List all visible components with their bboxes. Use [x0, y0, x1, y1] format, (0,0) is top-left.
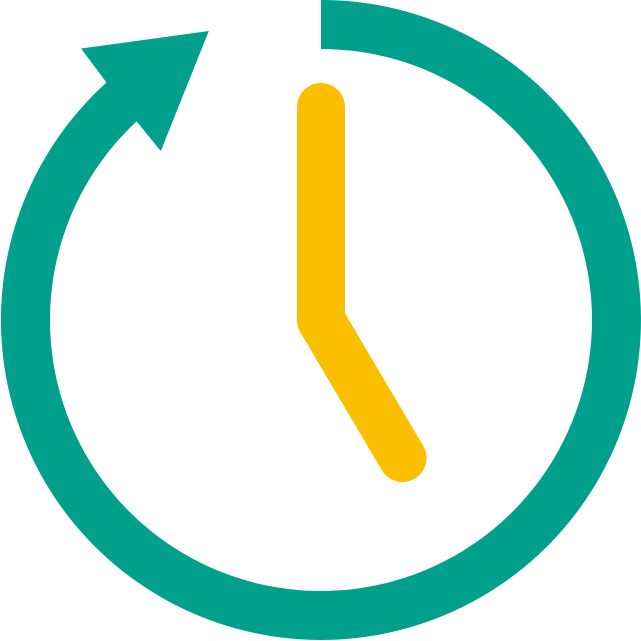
icon: clock hands: [321, 107, 402, 458]
